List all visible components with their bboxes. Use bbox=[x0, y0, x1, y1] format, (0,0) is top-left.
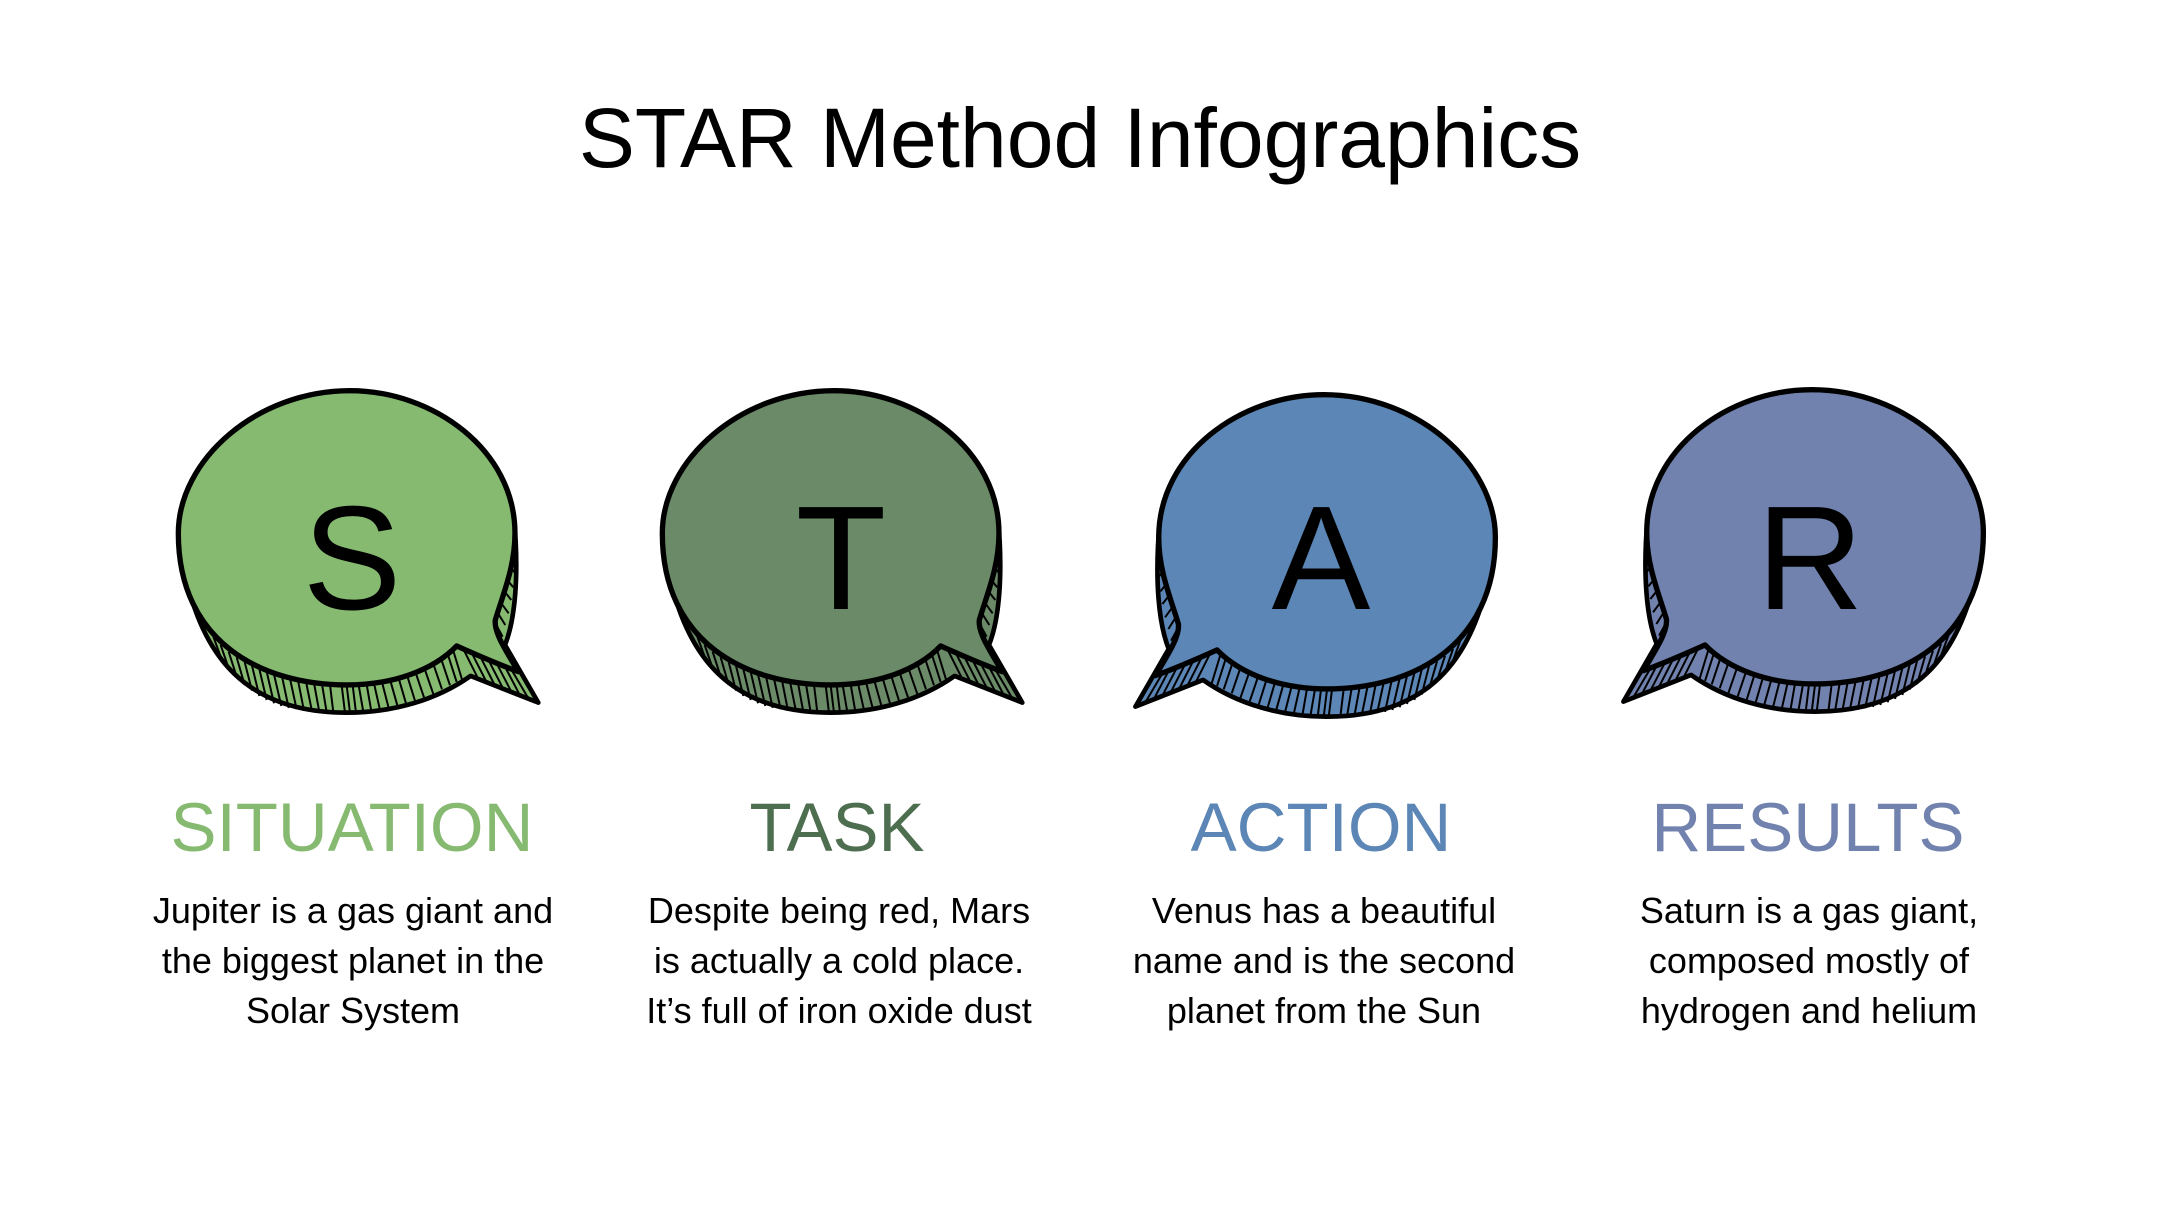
text block: situation: Solar System bbox=[246, 990, 460, 1031]
title: STAR Method Infographics bbox=[579, 91, 1581, 185]
letter A: A bbox=[1272, 476, 1371, 641]
icon: speech bubble S bbox=[178, 391, 538, 713]
letter R: R bbox=[1757, 476, 1863, 641]
heading: action: ACTION bbox=[1191, 789, 1451, 866]
text block: task: It’s full of iron oxide dust bbox=[646, 990, 1032, 1031]
icon: speech bubble A bbox=[1135, 395, 1495, 717]
icon: speech bubble R bbox=[1623, 390, 1983, 712]
heading: results: RESULTS bbox=[1651, 789, 1965, 866]
text block: results: hydrogen and helium bbox=[1641, 990, 1977, 1031]
letter T: T bbox=[796, 476, 886, 641]
icon: speech bubble T bbox=[662, 391, 1022, 713]
text block: task: is actually a cold place. bbox=[654, 940, 1024, 981]
panel: action bbox=[1133, 395, 1515, 1031]
text block: results: Saturn is a gas giant, bbox=[1640, 890, 1978, 931]
heading: task: TASK bbox=[749, 789, 925, 866]
text block: situation: the biggest planet in the bbox=[162, 940, 544, 981]
panel: situation bbox=[153, 391, 553, 1031]
panel: results bbox=[1623, 390, 1983, 1031]
text block: action: name and is the second bbox=[1133, 940, 1515, 981]
text block: task: Despite being red, Mars bbox=[648, 890, 1030, 931]
text block: action: planet from the Sun bbox=[1167, 990, 1481, 1031]
text block: action: Venus has a beautiful bbox=[1152, 890, 1496, 931]
letter S: S bbox=[303, 476, 401, 641]
panel: task bbox=[646, 391, 1032, 1031]
text block: situation: Jupiter is a gas giant and bbox=[153, 890, 553, 931]
heading: situation: SITUATION bbox=[171, 789, 533, 866]
text block: results: composed mostly of bbox=[1649, 940, 1970, 981]
